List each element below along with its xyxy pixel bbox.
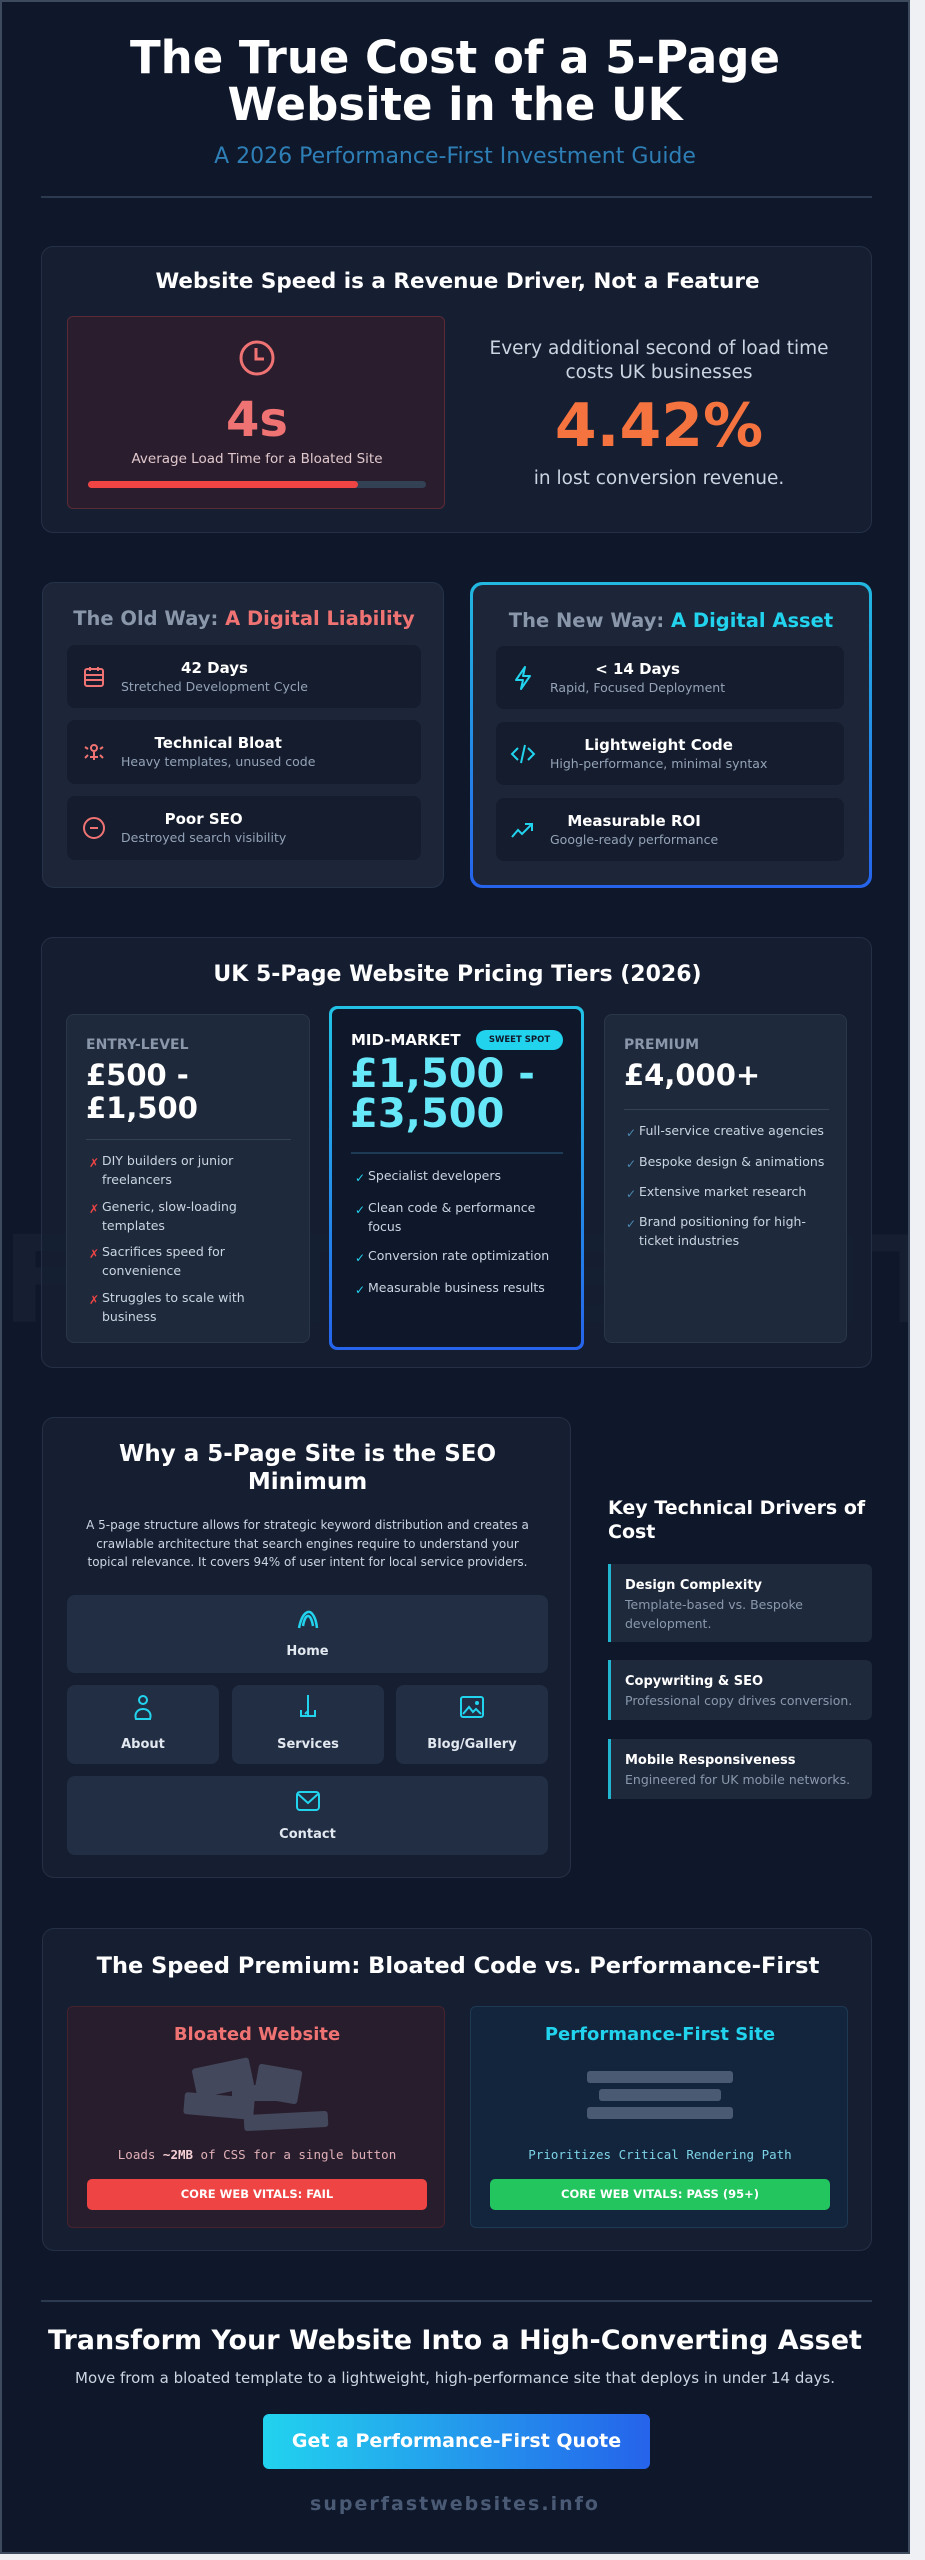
caption: performance: Prioritizes Critical Rendering Path [528, 2147, 792, 2162]
panel: old way [42, 582, 444, 888]
graphic: clean lines [587, 2071, 733, 2119]
card: mid-market: ✓ [355, 1283, 365, 1297]
heading: pricing: UK 5-Page Website Pricing Tiers (2026) [213, 962, 702, 987]
stat box: 4s [67, 316, 445, 509]
item: roi: Google-ready performance [550, 832, 718, 847]
progress bar [88, 481, 426, 488]
card: entry-level [66, 1014, 310, 1343]
page: contact: Contact [279, 1827, 336, 1842]
card: premium: PREMIUM [624, 1037, 699, 1053]
panel: pricing tiers [41, 937, 872, 1368]
item: poor seo: Destroyed search visibility [121, 830, 286, 845]
card: bloated [67, 2006, 445, 2228]
cta button: Get a Performance-First Quote [292, 2430, 621, 2452]
card: mid-market: Measurable business results [368, 1280, 545, 1295]
cta button [263, 2414, 650, 2469]
panel: new way [470, 582, 872, 888]
text: revenue stat: in lost conversion revenue. [534, 468, 784, 489]
card: premium [604, 1014, 847, 1343]
caption: load time: Average Load Time for a Bloated Site [131, 451, 383, 467]
card: entry-level: DIY builders or junior freelancers [102, 1153, 233, 1186]
heading: seo: Minimum [248, 1469, 367, 1495]
heading: speed: Website Speed is a Revenue Driver, Not a Feature [155, 269, 760, 294]
driver: mobile [608, 1739, 872, 1799]
card: mid-market: ✓ [355, 1203, 365, 1217]
card: bloated: Bloated Website [174, 2024, 340, 2045]
icon: home [298, 1610, 318, 1628]
heading: key drivers: Key Technical Drivers of Cost [608, 1497, 865, 1543]
icon: code [510, 744, 536, 764]
card: premium: Bespoke design & animations [639, 1154, 824, 1169]
price: entry: £1,500 [86, 1091, 198, 1125]
page: services [232, 1685, 384, 1764]
heading: seo: Why a 5-Page Site is the SEO [119, 1441, 496, 1467]
graphic: messy blocks [184, 2058, 328, 2131]
card: entry-level: Sacrifices speed for convenience [102, 1244, 225, 1278]
icon: person [134, 1695, 152, 1720]
card: performance-first [470, 2006, 848, 2228]
item: lightweight code: High-performance, minimal syntax [550, 756, 767, 771]
item: poor seo: Poor SEO [165, 810, 243, 828]
card: performance-first: Performance-First Site [545, 2024, 775, 2045]
cta text: Move from a bloated template to a lightweight, high-performance site that deploys in under 14 days. [75, 2369, 835, 2387]
icon: minus circle [83, 817, 105, 839]
badge: fail: CORE WEB VITALS: FAIL [181, 2187, 333, 2201]
text: seo paragraph: A 5-page structure allows for strategic keyword distribution and creates a crawlable architecture that search engines require to understand your topical relevance. It covers 94% of user intent for local service providers. [86, 1518, 529, 1569]
cta heading: Transform Your Website Into a High-Converting Asset [48, 2325, 862, 2356]
badge: sweet spot: SWEET SPOT [489, 1035, 550, 1045]
price: premium: £4,000+ [624, 1058, 760, 1092]
title: Website in the UK [228, 78, 682, 131]
driver: mobile: Mobile Responsiveness [625, 1753, 796, 1768]
badge: pass [490, 2179, 830, 2210]
item: lightweight code [496, 722, 844, 785]
heading: speed premium: The Speed Premium: Bloated Code vs. Performance-First [97, 1953, 819, 1979]
card: mid-market: MID-MARKET [351, 1031, 461, 1049]
heading: seo [119, 1441, 496, 1495]
page: about: About [121, 1737, 165, 1752]
card: premium: ✓ [626, 1157, 636, 1171]
item: lightweight code: Lightweight Code [584, 736, 733, 754]
card: entry-level: Generic, slow-loading templates [102, 1199, 237, 1232]
heading: new way: The New Way: A Digital Asset [509, 609, 833, 632]
page: about [67, 1685, 219, 1764]
price: entry [86, 1058, 198, 1125]
item: 42 days: 42 Days [181, 659, 248, 677]
subtitle: A 2026 Performance-First Investment Guide [214, 144, 696, 169]
stat: 4s: 4s [226, 392, 288, 448]
page: home [67, 1595, 548, 1673]
icon: calendar [84, 667, 104, 687]
badge: pass: CORE WEB VITALS: PASS (95+) [561, 2187, 759, 2201]
card: premium: Extensive market research [639, 1184, 806, 1199]
item: technical bloat: Heavy templates, unused code [121, 754, 315, 769]
price: mid [350, 1051, 535, 1137]
panel: seo minimum [42, 1417, 571, 1878]
driver: copywriting: Professional copy drives conversion. [625, 1693, 852, 1708]
panel: speed premium [42, 1928, 872, 2251]
card: entry-level: ENTRY-LEVEL [86, 1037, 189, 1053]
item: roi: Measurable ROI [567, 812, 701, 830]
card: entry-level: ✗ [89, 1247, 99, 1261]
item: 14 days: Rapid, Focused Deployment [550, 680, 725, 695]
driver: design complexity [608, 1564, 872, 1642]
page: contact [67, 1776, 548, 1855]
item: technical bloat: Technical Bloat [155, 734, 282, 752]
card: entry-level: ✗ [89, 1202, 99, 1216]
icon: image [460, 1696, 484, 1718]
icon: lightning [515, 666, 531, 690]
icon: clock [240, 340, 274, 376]
card: entry-level: Struggles to scale with business [102, 1290, 245, 1324]
page: blog [396, 1685, 548, 1764]
driver: copywriting: Copywriting & SEO [625, 1674, 763, 1689]
item: 14 days [496, 646, 844, 709]
item: 42 days [67, 645, 421, 708]
card: mid-market [329, 1006, 584, 1350]
page: home: Home [286, 1644, 329, 1659]
badge: sweet spot [476, 1030, 563, 1050]
card: premium: Brand positioning for high-ticket industries [639, 1214, 806, 1248]
item: 14 days: < 14 Days [595, 660, 680, 678]
card: premium: ✓ [626, 1126, 636, 1140]
driver: copywriting [608, 1660, 872, 1720]
stat: 4.42%: 4.42% [555, 391, 763, 461]
price: mid: £1,500 - [350, 1051, 535, 1097]
card: premium: Full-service creative agencies [639, 1123, 824, 1138]
card: premium: ✓ [626, 1217, 636, 1231]
page: blog: Blog/Gallery [427, 1737, 517, 1752]
card: mid-market: ✓ [355, 1251, 365, 1265]
item: roi [496, 798, 844, 861]
item: poor seo [67, 796, 421, 860]
card: mid-market: Specialist developers [368, 1168, 501, 1183]
icon: mail [296, 1791, 320, 1811]
driver: mobile: Engineered for UK mobile networks. [625, 1772, 850, 1787]
card: premium: ✓ [626, 1187, 636, 1201]
driver: design complexity: Template-based vs. Bespoke development. [625, 1597, 803, 1631]
driver: design complexity: Design Complexity [625, 1578, 762, 1593]
card: mid-market: ✓ [355, 1171, 365, 1185]
page: services: Services [277, 1737, 339, 1752]
title: The True Cost of a 5-Page [130, 31, 780, 84]
icon: trend [511, 823, 533, 838]
price: mid: £3,500 [350, 1091, 504, 1137]
text: revenue stat [490, 338, 828, 489]
price: entry: £500 - [86, 1058, 189, 1092]
footer url: superfastwebsites.info [310, 2493, 600, 2515]
panel: speed revenue [41, 246, 872, 533]
badge: fail [87, 2179, 427, 2210]
caption: bloated: Loads ~2MB of CSS for a single button [118, 2147, 396, 2162]
item: 42 days: Stretched Development Cycle [121, 679, 308, 694]
card: entry-level: ✗ [89, 1156, 99, 1170]
title [130, 31, 780, 131]
card: entry-level: ✗ [89, 1293, 99, 1307]
card: mid-market: Conversion rate optimization [368, 1248, 549, 1263]
item: technical bloat [67, 720, 421, 784]
heading: old way: The Old Way: A Digital Liability [73, 607, 415, 630]
icon: services [300, 1695, 316, 1717]
text: revenue stat: Every additional second of load time costs UK businesses [490, 338, 828, 383]
card: mid-market: Clean code & performance focus [368, 1200, 535, 1234]
icon: bloat [84, 744, 104, 760]
